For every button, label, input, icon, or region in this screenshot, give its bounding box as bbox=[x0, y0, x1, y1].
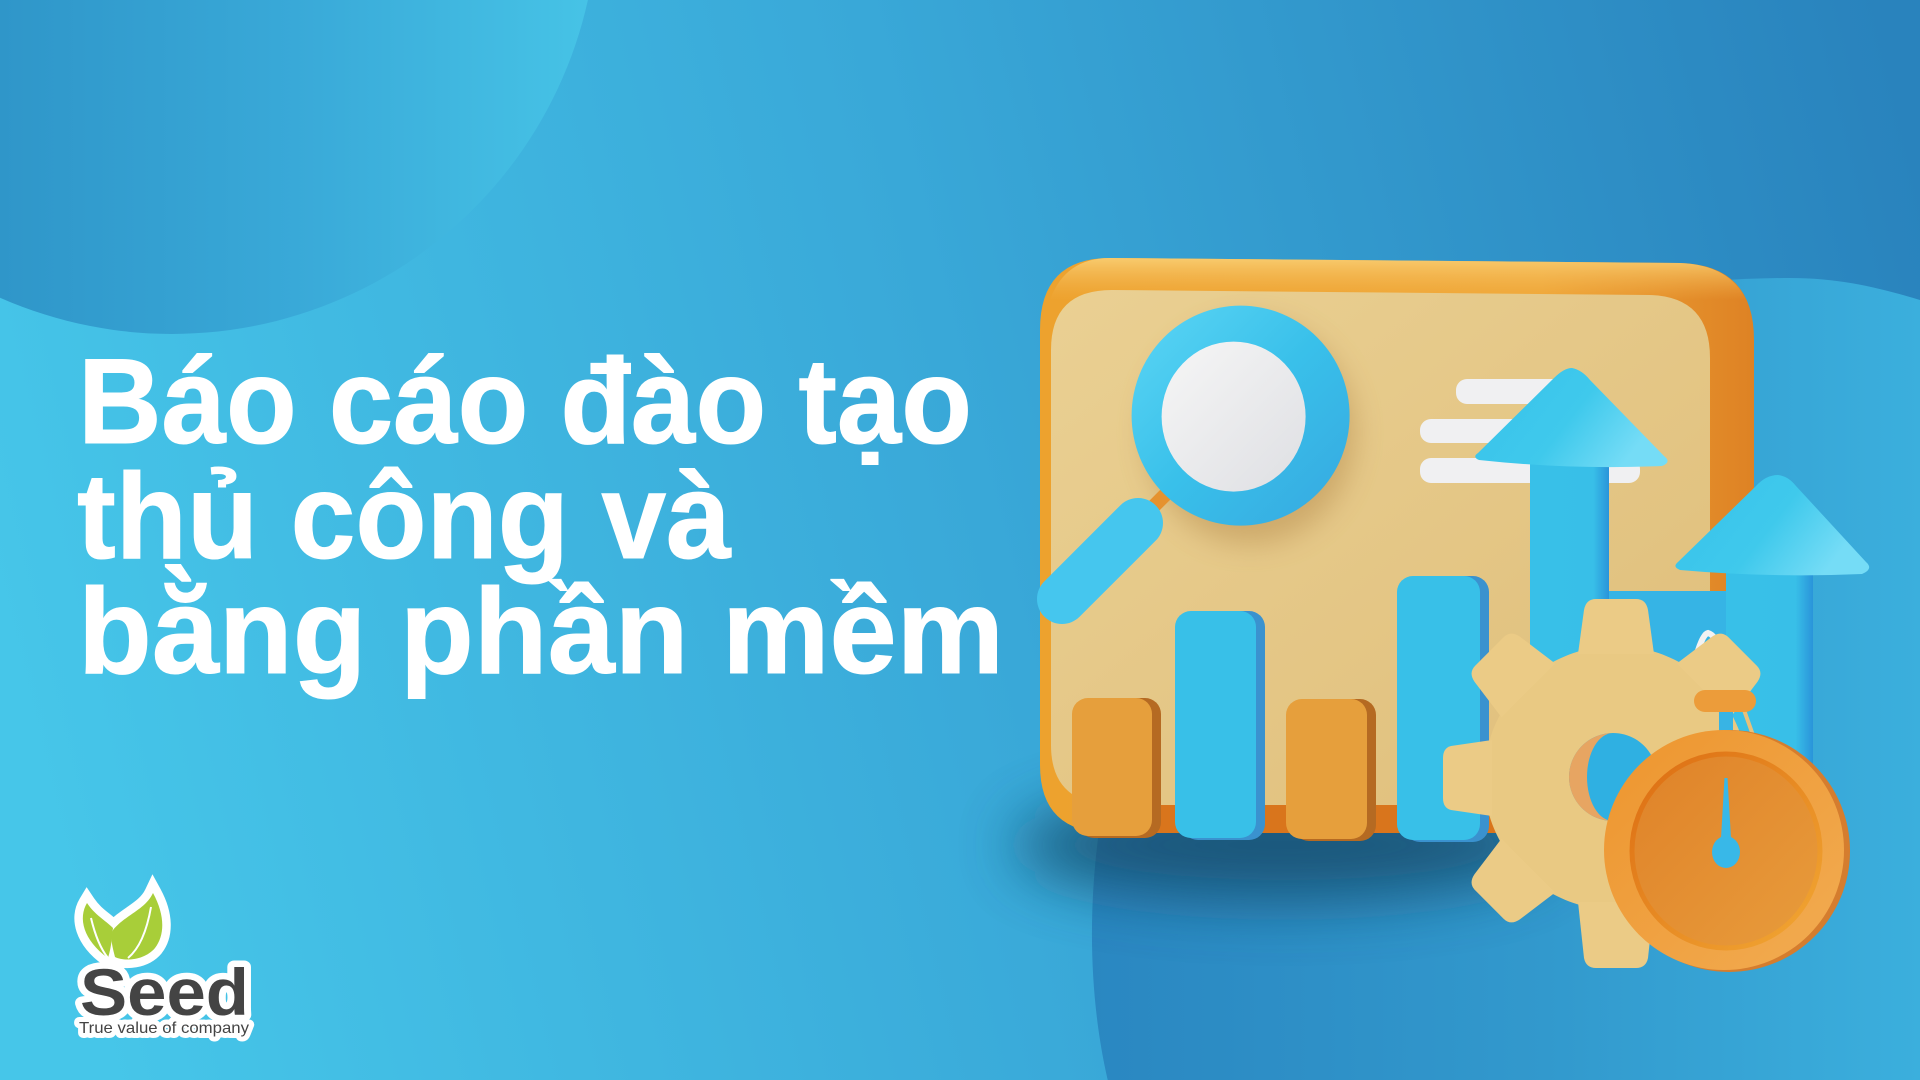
icon: stopwatch bbox=[1604, 690, 1850, 972]
title bbox=[77, 333, 1004, 699]
gear teeth bbox=[1443, 599, 1769, 968]
logo: Seed bbox=[79, 893, 249, 1037]
bar: blue 2 bbox=[1397, 576, 1489, 842]
gear hole inner wall bbox=[1569, 733, 1613, 821]
arrow group bbox=[1475, 368, 1869, 821]
magnifier handle bbox=[1062, 523, 1138, 599]
stopwatch knob bbox=[1694, 690, 1756, 712]
bar: orange 1 bbox=[1072, 698, 1161, 838]
gear body bbox=[1484, 646, 1748, 910]
stopwatch needle bbox=[1721, 778, 1731, 838]
icon: leaves bbox=[83, 893, 162, 960]
magnifier neck bbox=[1145, 492, 1168, 515]
wordmark: Seed bbox=[80, 955, 249, 1029]
arrow 1 stem bbox=[1530, 455, 1609, 785]
bar: blue 1 bbox=[1175, 611, 1265, 840]
arrow 1 head bbox=[1475, 368, 1668, 467]
card top highlight bbox=[1050, 258, 1746, 300]
decorative circle top left bbox=[0, 0, 588, 334]
arrow 2 stem bbox=[1726, 560, 1813, 765]
decorative blob bottom right bbox=[1092, 278, 1920, 1080]
arrow 2 head bbox=[1675, 475, 1869, 575]
text lines bbox=[1420, 379, 1640, 483]
icon: magnifier bbox=[1062, 306, 1350, 599]
title: Báo cáo đào tạo bbox=[78, 333, 972, 469]
title: thủ công và bbox=[77, 448, 732, 584]
magnifier lens bbox=[1162, 342, 1306, 492]
stopwatch stem bbox=[1719, 708, 1733, 734]
stopwatch hoop bbox=[1694, 633, 1722, 664]
bar chart bbox=[1072, 576, 1489, 842]
magnifier shade bbox=[1145, 320, 1355, 544]
stopwatch pivot bbox=[1712, 836, 1740, 868]
card bottom edge bbox=[1090, 800, 1510, 833]
panel: inner cream card bbox=[1051, 290, 1710, 805]
title: bằng phần mềm bbox=[78, 563, 1004, 699]
gear hole backdrop bbox=[1567, 731, 1659, 823]
stopwatch outer rim bbox=[1608, 730, 1850, 972]
stopwatch strap bbox=[1744, 710, 1754, 738]
connector block bbox=[1600, 591, 1735, 821]
tagline: True value of company bbox=[79, 1020, 249, 1037]
magnifier ring bbox=[1132, 306, 1350, 526]
icon: gear bbox=[1443, 599, 1769, 968]
card drop shadow bbox=[1015, 790, 1555, 900]
illustration: report dashboard bbox=[1040, 258, 1869, 972]
bar: orange 2 bbox=[1286, 699, 1376, 841]
panel: outer orange card bbox=[1040, 258, 1754, 833]
stopwatch face bbox=[1632, 754, 1820, 948]
